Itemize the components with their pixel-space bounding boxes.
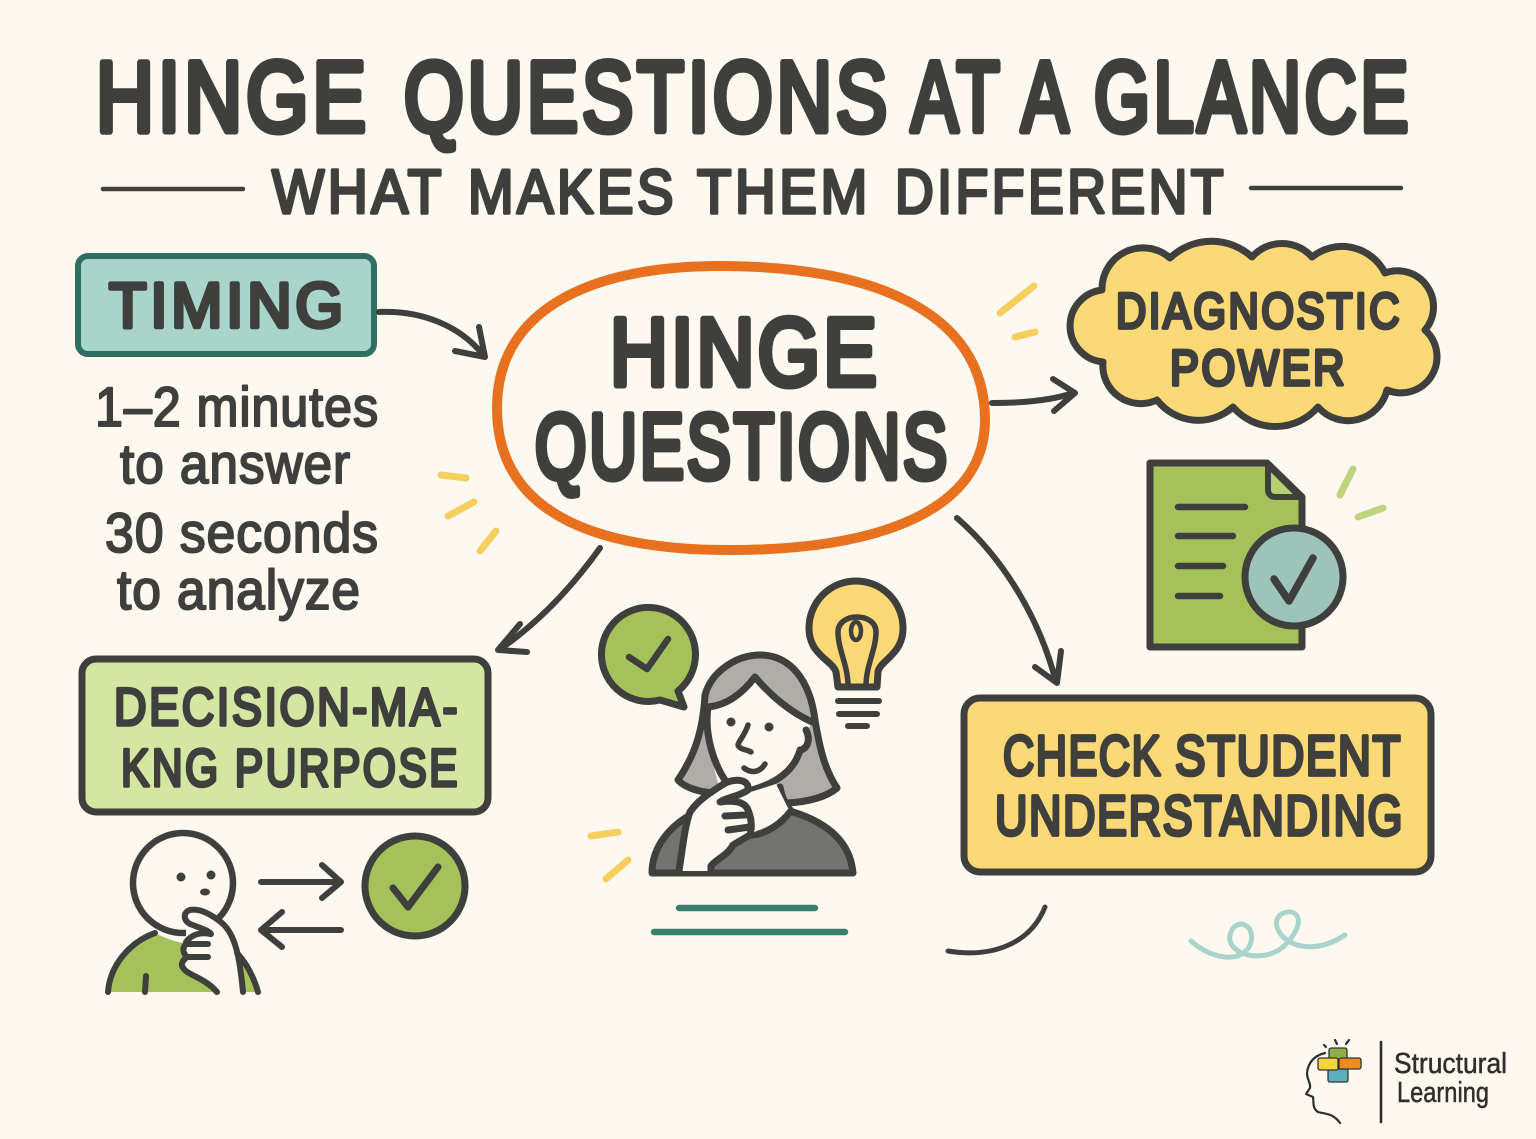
panel: diagnostic power cloud [1070, 241, 1437, 427]
title: QUESTIONS [404, 41, 891, 152]
icon: speech bubble check [601, 607, 695, 707]
logo: structural learning: Learning [1397, 1077, 1489, 1109]
decorative squiggle [1191, 912, 1345, 957]
subtitle: WHAT [272, 158, 445, 227]
title: AT A [911, 41, 1072, 152]
title [96, 41, 1412, 152]
panel: timing label: TIMING [109, 271, 347, 341]
sparks: below speech bubble [591, 832, 628, 879]
illustration: thinking woman [652, 655, 853, 873]
subtitle: THEM [697, 158, 871, 227]
title: HINGE [96, 41, 370, 152]
text block: timing details: 30 seconds [105, 501, 379, 564]
panel: central hinge questions: HINGE [610, 299, 880, 406]
panel: central hinge questions [497, 266, 985, 550]
logo: structural learning: Structural [1394, 1048, 1507, 1080]
lines under woman [654, 908, 845, 932]
title: GLANCE [1094, 41, 1412, 152]
panel: decision-making purpose [82, 659, 488, 812]
decorative curve [948, 907, 1045, 953]
logo: structural learning [1306, 1040, 1507, 1123]
panel: check student understanding: STUDENT [1175, 724, 1402, 788]
panel: check student understanding: CHECK [1003, 724, 1162, 788]
panel: decision-making purpose: DECISION-MA- [114, 678, 460, 737]
arrow: to diagnostic power [992, 379, 1075, 411]
subtitle: MAKES [468, 158, 677, 227]
text block: timing details [95, 375, 379, 621]
panel: check student understanding: UNDERSTANDING [995, 784, 1404, 848]
subtitle: DIFFERENT [895, 158, 1227, 227]
icon: document with check [1150, 463, 1383, 647]
icon: light bulb [809, 581, 903, 726]
panel: central hinge questions: QUESTIONS [535, 396, 950, 498]
text block: timing details: to answer [120, 432, 351, 495]
text block: timing details: to analyze [117, 558, 361, 621]
panel: diagnostic power cloud: DIAGNOSTIC [1116, 283, 1402, 339]
panel: timing label [78, 256, 374, 354]
arrow: to check student understanding [957, 518, 1061, 683]
sparks: left of centre [441, 475, 496, 551]
arrow: to decision-making purpose [498, 548, 600, 652]
subtitle [103, 158, 1401, 227]
icon: check circle [365, 836, 465, 936]
sparks: upper right of centre [1000, 286, 1035, 337]
text block: timing details: 1–2 minutes [95, 375, 379, 438]
panel: check student understanding [964, 698, 1431, 872]
panel: diagnostic power cloud: POWER [1170, 340, 1347, 396]
arrow: timing to hinge questions [379, 312, 485, 357]
panel: decision-making purpose: KNG PURPOSE [121, 739, 460, 798]
icon: thinking person [108, 833, 258, 992]
icon: double arrows [261, 865, 341, 947]
